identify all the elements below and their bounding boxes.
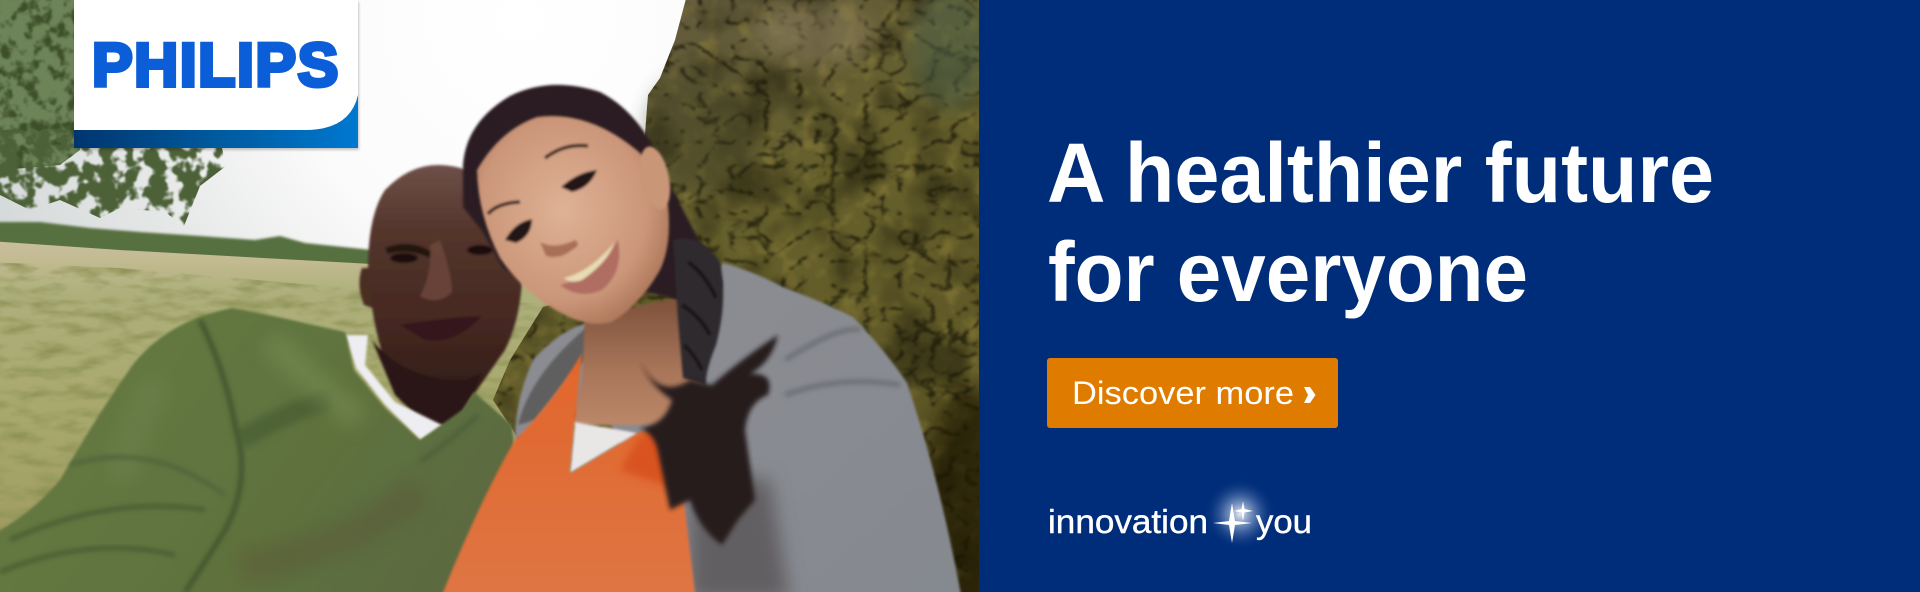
button: Discover more	[1047, 358, 1338, 428]
woman: orange top	[440, 353, 696, 592]
woman: braid	[673, 238, 723, 385]
woman: loose hair over shoulder	[640, 335, 778, 545]
heading: A healthier future	[1047, 126, 1714, 220]
button: Discover more: Discover more	[1072, 375, 1294, 411]
icon: sparkle star	[1204, 478, 1276, 550]
tagline: innovation and you: innovation	[1048, 503, 1208, 540]
background panel: navy	[979, 0, 1920, 592]
icon: chevron	[1304, 387, 1316, 403]
tagline: innovation and you: you	[1256, 503, 1312, 540]
heading	[1047, 126, 1714, 319]
heading: for everyone	[1048, 225, 1528, 319]
tagline: innovation and you	[1048, 478, 1312, 550]
man: green sweater	[0, 308, 516, 592]
woman: neck and chest	[572, 295, 700, 425]
grass field	[0, 242, 550, 532]
woman: face	[477, 116, 675, 324]
woman: grey cardigan	[515, 263, 962, 592]
tree foliage	[0, 0, 226, 226]
distant tree line	[0, 222, 372, 268]
logo wordmark: PHILIPS	[92, 31, 340, 99]
man: head and neck	[359, 165, 522, 428]
woman: darker inner cardigan stripe	[518, 328, 586, 426]
tree trunk with bark texture	[493, 0, 1005, 592]
sky	[0, 0, 686, 252]
man: white t-shirt collar	[346, 335, 444, 440]
woman: hair	[461, 82, 724, 300]
woman: white shirt	[570, 422, 637, 473]
photo: couple taking a selfie in a park	[0, 0, 1005, 592]
logo: Philips shield	[74, 0, 359, 150]
